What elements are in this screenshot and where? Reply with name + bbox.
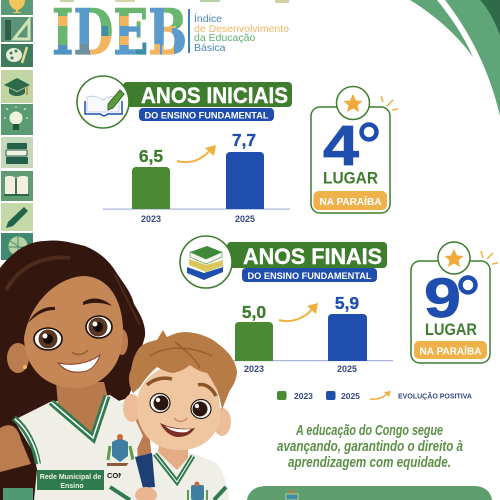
- axis: [103, 208, 290, 210]
- bar 2025: [226, 152, 264, 209]
- IDEB logo: [52, 0, 289, 69]
- neck: [56, 382, 108, 438]
- face: [137, 362, 220, 450]
- icon: open book and pencil: [77, 76, 129, 128]
- closing statement: A educação do Congo segue: [295, 423, 443, 439]
- section: anos finais: [180, 236, 393, 374]
- label: LUGAR: [425, 321, 477, 339]
- rank card: 4th place: [311, 86, 398, 213]
- crest: CONGO: [107, 471, 136, 480]
- eyebrows: [147, 378, 172, 385]
- collar: [155, 454, 193, 482]
- subheading pill: DO ENSINO FUNDAMENTAL: [248, 271, 372, 282]
- shirt: [14, 395, 143, 500]
- nose: [174, 418, 187, 421]
- bar chart: 5,9: [335, 293, 359, 313]
- icon: books: [180, 236, 232, 288]
- eyes: [150, 394, 211, 418]
- collar: [51, 396, 107, 438]
- bar chart: [103, 130, 290, 224]
- hand: [135, 487, 157, 500]
- rank card: 9th place: [411, 242, 498, 363]
- degree sign: [460, 278, 476, 292]
- face: [24, 276, 123, 388]
- arrow: [279, 303, 318, 321]
- legend: 2023: [294, 391, 313, 401]
- mouth: [58, 355, 100, 372]
- icon: light bulb: [1, 104, 33, 135]
- legend: 2025: [341, 391, 360, 401]
- icon: stack of books: [1, 137, 33, 168]
- region pill: NA PARAÍBA: [320, 195, 382, 208]
- rank number: 4: [323, 114, 359, 178]
- earrings: [23, 365, 27, 369]
- bar 2023: [235, 322, 273, 361]
- icon: graduation cap: [1, 70, 33, 103]
- closing statement: [277, 423, 463, 471]
- sidebar icon tiles: [1, 0, 33, 260]
- hem pattern: [3, 488, 33, 500]
- section: anos iniciais: [77, 76, 292, 224]
- legend: [277, 391, 473, 401]
- sleeve trim: [110, 487, 226, 500]
- values: 5,0: [242, 302, 266, 322]
- star badge: [336, 86, 370, 120]
- star badge: [438, 242, 470, 274]
- bar chart: 2025: [337, 364, 357, 374]
- label: LUGAR: [323, 170, 378, 188]
- legend: EVOLUÇÃO POSITIVA: [398, 392, 473, 400]
- hair: [0, 241, 145, 500]
- neck: [158, 440, 188, 470]
- bar chart: 2025: [235, 214, 255, 224]
- closing statement: aprendizagem com equidade.: [288, 455, 451, 471]
- header bar: [227, 242, 387, 268]
- shirt badge: [37, 470, 104, 490]
- header bar: [123, 82, 292, 107]
- heading: ANOS FINAIS: [243, 244, 382, 269]
- right arm: [135, 410, 152, 462]
- shirt crest: [188, 482, 207, 500]
- bar chart: [200, 293, 393, 374]
- bar 2025: [328, 314, 367, 361]
- icon: trophy: [1, 0, 33, 15]
- icon: globe: [1, 233, 33, 260]
- top right green wave: [410, 0, 500, 116]
- logo caption: Básica: [194, 42, 226, 54]
- axis: [200, 360, 393, 361]
- sleeve trim: [14, 418, 38, 464]
- ears: [7, 343, 29, 373]
- left arm: [0, 425, 31, 472]
- eyes: [34, 316, 112, 350]
- icon: pencil: [1, 203, 33, 231]
- legend arrow: [370, 391, 391, 399]
- nose: [72, 350, 88, 354]
- icon: open book: [1, 171, 33, 201]
- arrow: [177, 145, 216, 162]
- values: 6,5: [139, 146, 163, 166]
- top edge remnants of cropped heading: [60, 0, 289, 3]
- heading: ANOS INICIAIS: [141, 83, 288, 108]
- shirt badge: Ensino: [60, 483, 84, 490]
- logo caption: Índice: [194, 12, 222, 25]
- hair: [129, 330, 237, 410]
- logo caption: da Educação: [194, 32, 255, 44]
- rank number: 9: [424, 266, 461, 329]
- backpack strap: [135, 453, 155, 488]
- icon: ruler and set square: [1, 17, 33, 42]
- footer panel: [247, 486, 492, 500]
- bar chart: 7,7: [232, 130, 256, 150]
- eyebrows: [28, 307, 55, 323]
- illustration: girl: [0, 241, 152, 500]
- subheading pill: DO ENSINO FUNDAMENTAL: [144, 110, 269, 122]
- shirt badge: Rede Municipal de: [40, 474, 101, 481]
- year labels: 2023: [141, 214, 161, 224]
- icon: palette: [1, 44, 33, 67]
- crest: [107, 434, 136, 480]
- degree sign: [362, 124, 376, 140]
- region pill: NA PARAÍBA: [420, 344, 482, 358]
- logo caption: de Desenvolvimento: [194, 23, 289, 35]
- sparkle rays: [381, 96, 398, 110]
- logo divider: [188, 9, 190, 53]
- logo caption: [194, 12, 289, 54]
- shirt: [109, 453, 229, 500]
- illustration: boy: [109, 330, 237, 500]
- ears: [123, 394, 141, 422]
- sparkle rays: [481, 251, 498, 264]
- footer crest: [286, 490, 298, 500]
- year labels: 2023: [244, 364, 264, 374]
- mouth: [160, 423, 195, 437]
- bar 2023: [132, 167, 170, 209]
